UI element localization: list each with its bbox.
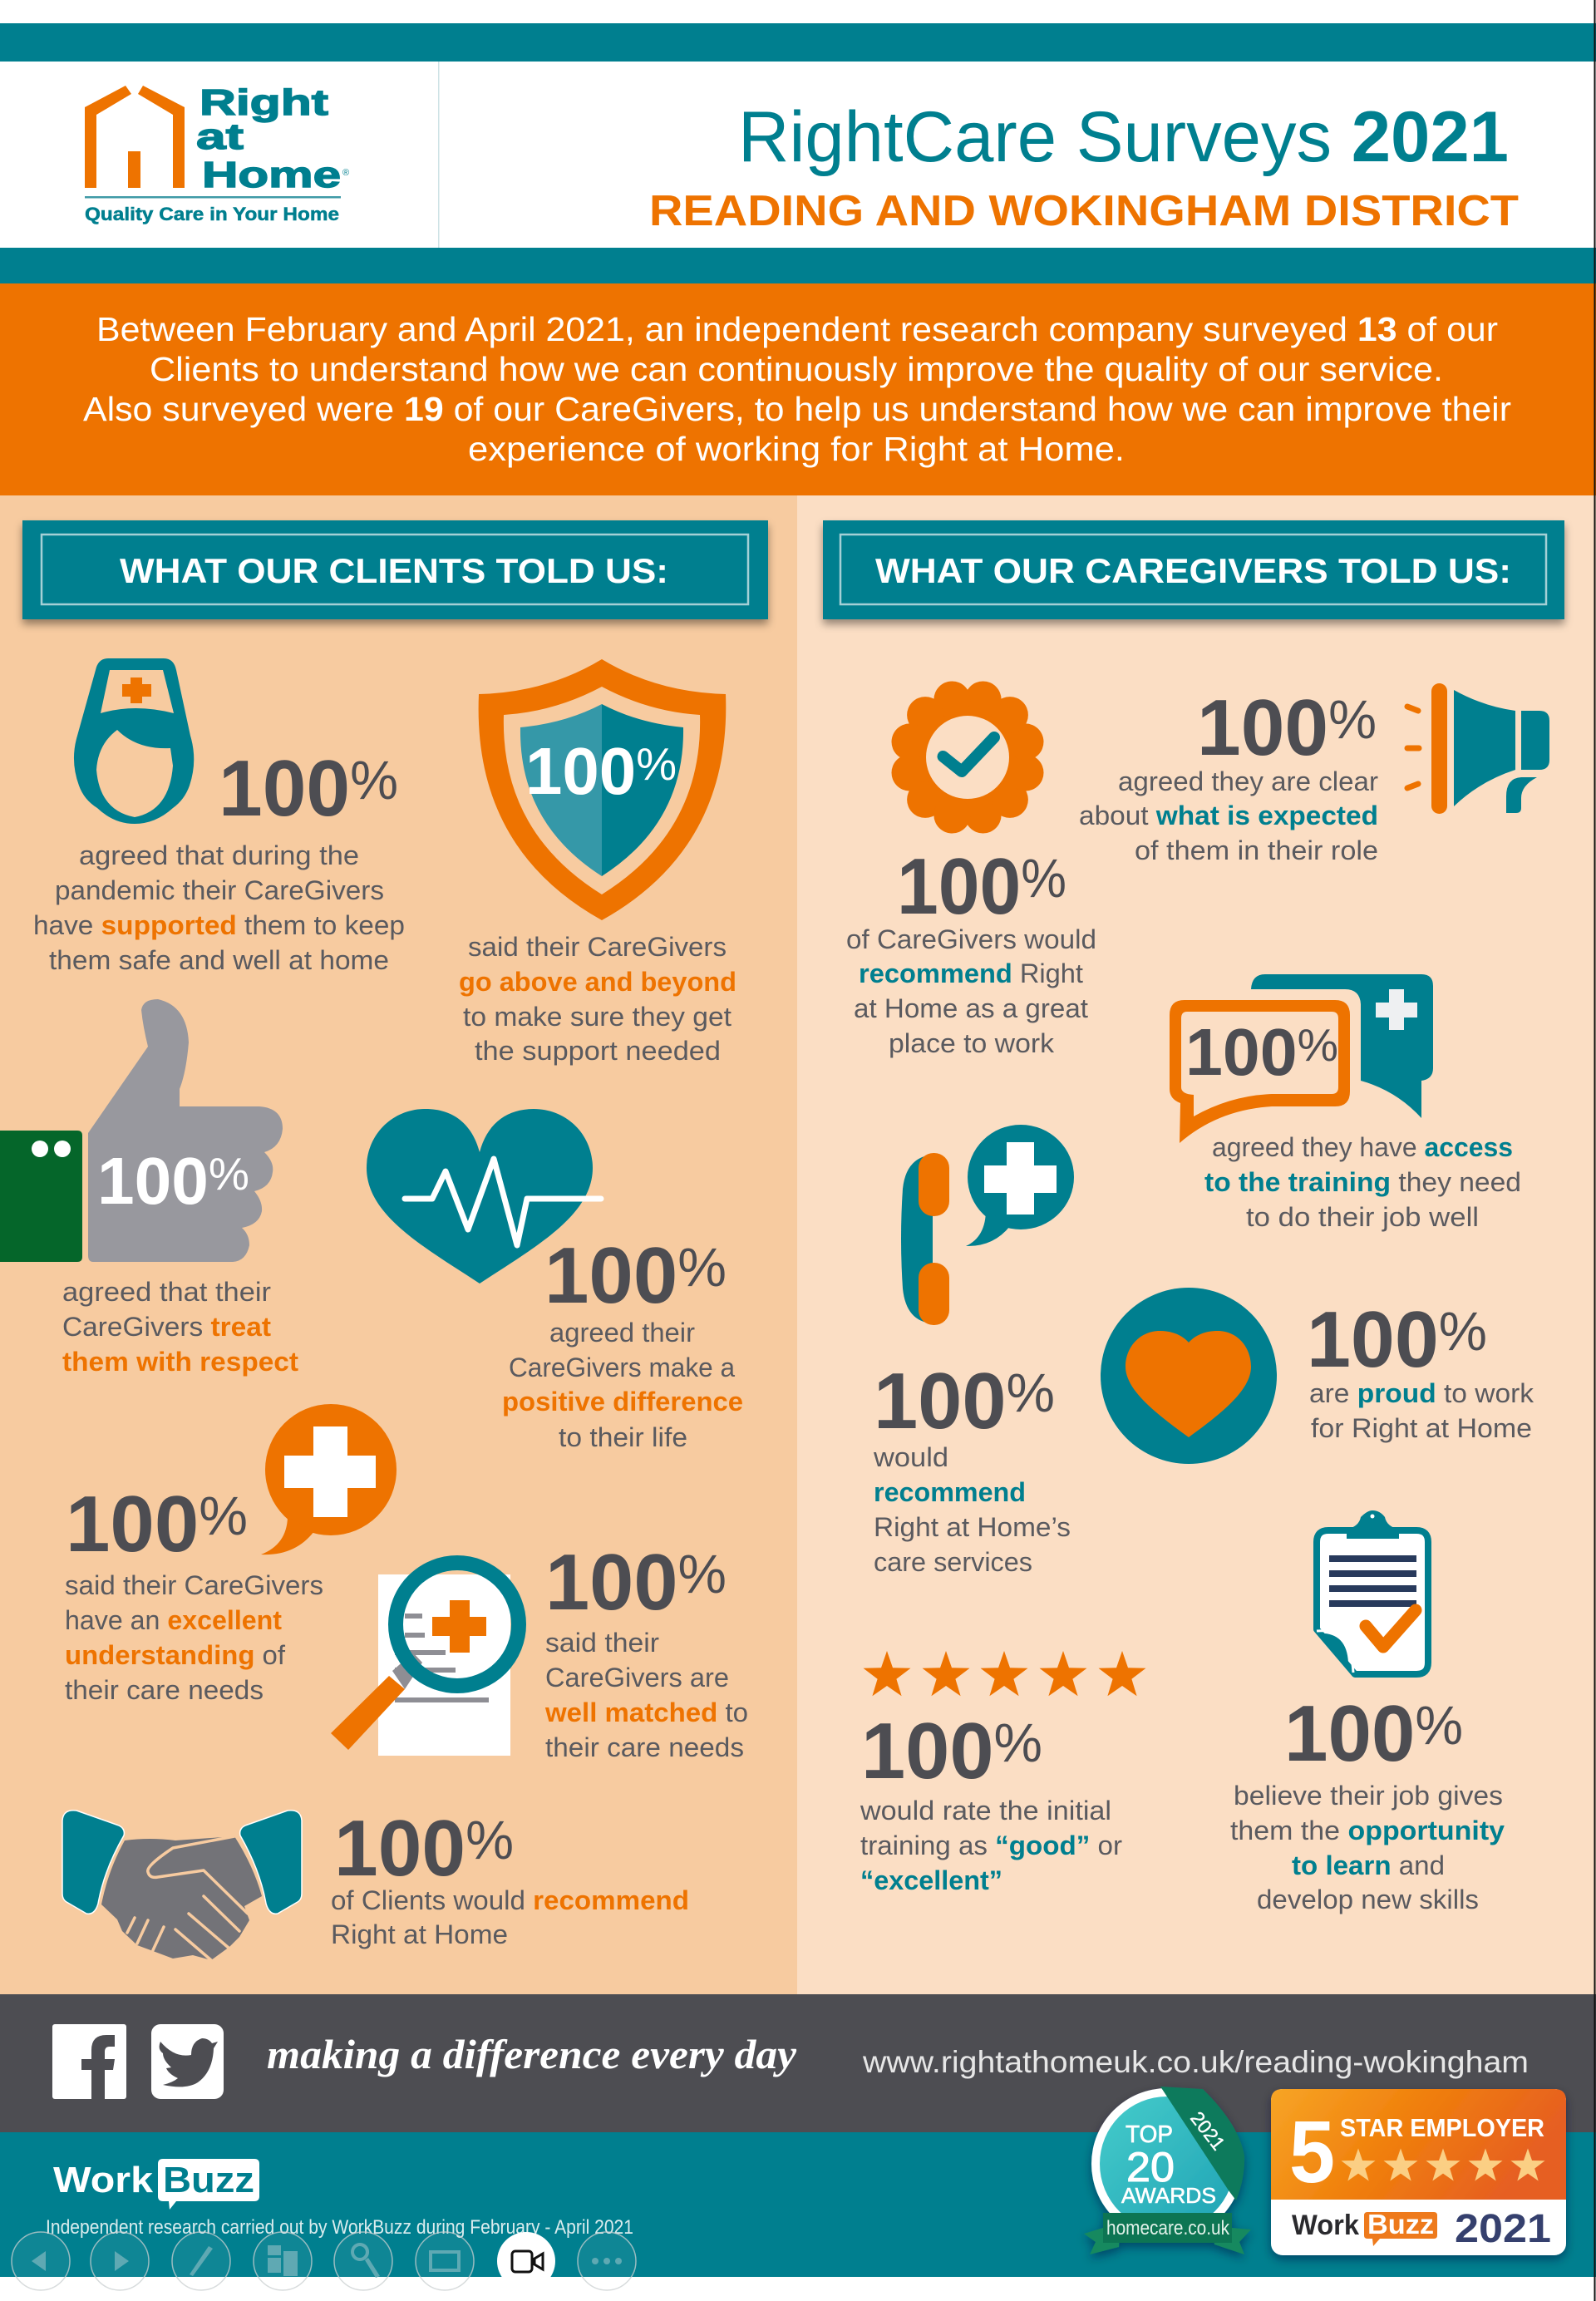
logo wordmark: at: [196, 116, 244, 157]
stat: recommend care services: [873, 1125, 1074, 1577]
panel: clients: [0, 495, 797, 1994]
description: said their CareGivers: [468, 932, 727, 962]
icon: megaphone: [1407, 683, 1549, 814]
icon: nurse: [74, 658, 194, 824]
description: them the opportunity: [1230, 1816, 1505, 1845]
percentage: 100: [544, 1231, 677, 1320]
stat: recommend: [62, 1804, 689, 1960]
description: of them in their role: [1135, 835, 1378, 865]
header band: [0, 23, 1596, 283]
description: [331, 1885, 689, 1949]
icon: speech bubbles: [1170, 974, 1433, 1143]
footer: social band: [0, 1994, 1596, 2132]
description: for Right at Home: [1311, 1413, 1532, 1443]
percentage: 100: [1197, 683, 1330, 772]
percentage: %: [466, 1809, 514, 1870]
icon: facebook: [52, 2024, 126, 2099]
percentage: %: [1021, 847, 1066, 909]
description: [1204, 1132, 1521, 1232]
title: RightCare Surveys 2021: [738, 97, 1509, 177]
description: Right at Home’s: [874, 1512, 1071, 1542]
description: [544, 1628, 748, 1762]
description: said their: [545, 1628, 659, 1658]
award: 5 star employer: Work: [1292, 2210, 1359, 2241]
percentage: 100: [874, 1357, 1007, 1446]
description: believe their job gives: [1234, 1781, 1503, 1811]
description: to learn and: [1292, 1850, 1445, 1880]
description: said their CareGivers: [65, 1570, 323, 1600]
icon: twitter: [151, 2024, 224, 2099]
percentage: %: [994, 1712, 1042, 1773]
award: Top 20: [1084, 2087, 1251, 2254]
description: their care needs: [545, 1732, 744, 1762]
description: [1309, 1378, 1534, 1443]
description: recommend: [874, 1477, 1026, 1507]
logo: WorkBuzz: [53, 2159, 259, 2210]
percentage: 100: [219, 744, 352, 833]
icon: magnifier over document: [331, 1563, 519, 1756]
description: care services: [874, 1547, 1032, 1577]
description: [502, 1318, 743, 1452]
logo: WorkBuzz: Work: [53, 2160, 154, 2200]
presentation controls: [12, 2232, 636, 2290]
panel: caregivers: [797, 495, 1596, 1994]
stat: access to the training: [1170, 974, 1521, 1232]
icon: five stars: [863, 1651, 1145, 1696]
description: [459, 932, 736, 1066]
icon: telephone with medical bubble: [901, 1125, 1074, 1325]
research note: Independent research carried out by WorkBuzz during February - April 2021: [46, 2216, 633, 2239]
percentage: %: [1298, 1019, 1338, 1071]
stat: supported: [33, 658, 405, 975]
description: would rate the initial: [860, 1796, 1111, 1826]
description: [846, 924, 1096, 1058]
description: [33, 840, 405, 975]
description: them with respect: [62, 1347, 298, 1377]
description: understanding of: [65, 1640, 285, 1670]
description: the support needed: [475, 1036, 721, 1066]
percentage: %: [1439, 1300, 1487, 1362]
award: 5 star employer: 2021: [1455, 2207, 1551, 2251]
description: develop new skills: [1257, 1885, 1479, 1914]
description: pandemic their CareGivers: [55, 875, 384, 905]
stat: initial training rating: [860, 1651, 1145, 1895]
description: agreed that their: [62, 1277, 271, 1307]
intro panel: Clients to understand how we can continuously improve the quality of our service.: [150, 350, 1443, 388]
footer: teal band: [0, 2132, 1596, 2277]
description: [65, 1570, 323, 1705]
description: agreed their: [549, 1318, 695, 1348]
stat: excellent understanding: [65, 1404, 397, 1705]
stat: opportunity to learn: [1230, 1510, 1505, 1914]
award: Top 20: 2021: [1186, 2107, 1229, 2154]
logo wordmark: ®: [342, 168, 349, 178]
percentage: %: [350, 749, 398, 811]
description: CareGivers treat: [62, 1312, 271, 1342]
stat: respect: [0, 999, 298, 1377]
percentage: 100: [1185, 1015, 1296, 1089]
heading: what our clients told us: [22, 520, 768, 619]
description: agreed they have access: [1212, 1132, 1513, 1162]
description: at Home as a great: [854, 993, 1088, 1023]
description: are proud to work: [1309, 1378, 1534, 1408]
description: have supported them to keep: [33, 910, 405, 940]
description: go above and beyond: [459, 967, 736, 997]
description: agreed that during the: [79, 840, 359, 870]
icon: thumbs up: %: [209, 1148, 249, 1200]
description: [1230, 1781, 1505, 1914]
icon: shield: [479, 659, 726, 920]
logo wordmark: Home: [202, 155, 341, 195]
active video control: [497, 2232, 555, 2290]
description: [1079, 766, 1378, 865]
description: CareGivers make a: [509, 1353, 735, 1382]
heading: what our caregivers told us: [823, 520, 1564, 619]
award: 5 star employer: [1271, 2089, 1566, 2255]
tagline: making a difference every day: [267, 2031, 797, 2077]
percentage: 100: [545, 1538, 678, 1627]
description: recommend Right: [859, 958, 1083, 988]
percentage: %: [1415, 1694, 1463, 1756]
intro panel: Between February and April 2021, an independent research company surveyed 13 of our: [96, 310, 1498, 348]
percentage: %: [677, 1236, 727, 1298]
description: would: [873, 1442, 948, 1472]
award: Top 20: 20: [1126, 2144, 1175, 2190]
intro panel: [0, 283, 1596, 495]
stat: what is expected: [1079, 683, 1549, 865]
website: www.rightathomeuk.co.uk/reading-wokingham: [862, 2045, 1529, 2079]
description: [62, 1277, 298, 1377]
description: to make sure they get: [463, 1002, 732, 1032]
description: [860, 1796, 1122, 1895]
logo: Right at Home: [85, 82, 349, 224]
icon: medical speech bubble: [261, 1404, 397, 1555]
award: Top 20: AWARDS: [1121, 2183, 1216, 2208]
percentage: 100: [1307, 1295, 1440, 1384]
percentage: 100: [897, 842, 1030, 931]
award: 5 star employer: Buzz: [1367, 2209, 1434, 2239]
award: 5 star employer: STAR EMPLOYER: [1340, 2113, 1544, 2142]
percentage: 100: [861, 1707, 994, 1796]
icon: clipboard with tick: [1317, 1510, 1428, 1674]
logo: WorkBuzz: Buzz: [163, 2160, 254, 2200]
percentage: %: [1328, 688, 1377, 750]
description: “excellent”: [860, 1865, 1002, 1895]
description: Right at Home: [331, 1919, 508, 1949]
award: Top 20: TOP: [1126, 2121, 1173, 2148]
description: have an excellent: [65, 1605, 282, 1635]
description: to the training they need: [1204, 1167, 1521, 1197]
description: positive difference: [502, 1387, 743, 1417]
description: of Clients would recommend: [331, 1885, 689, 1915]
description: about what is expected: [1079, 801, 1378, 830]
description: place to work: [889, 1028, 1055, 1058]
icon: house: [85, 86, 185, 188]
award: 5 star employer: 5: [1289, 2103, 1335, 2201]
percentage: %: [199, 1485, 248, 1546]
icon: shield: 100: [525, 734, 636, 808]
description: of CareGivers would: [846, 924, 1096, 954]
stat: proud: [1101, 1288, 1534, 1464]
icon: heart with pulse: [367, 1109, 601, 1284]
stat: positive difference: [367, 1109, 743, 1452]
description: their care needs: [65, 1675, 264, 1705]
description: them safe and well at home: [49, 945, 389, 975]
icon: thumbs up: 100: [97, 1144, 208, 1218]
stat: above and beyond: [459, 659, 736, 1066]
stat: well matched: [331, 1538, 748, 1762]
logo wordmark: Right: [200, 82, 328, 123]
description: well matched to: [544, 1697, 748, 1727]
logo wordmark: [85, 82, 349, 224]
window edge line: [1594, 0, 1596, 2301]
icon: rosette check badge: [891, 682, 1044, 833]
percentage: %: [1007, 1362, 1055, 1423]
stat: recommend as a place to work: [846, 682, 1096, 1058]
award: Top 20: homecare.co.uk: [1106, 2217, 1230, 2239]
icon: shield: %: [636, 738, 677, 790]
heading: what our clients told us: WHAT OUR CLIENTS TOLD US:: [120, 551, 668, 590]
description: to do their job well: [1246, 1202, 1479, 1232]
description: CareGivers are: [545, 1663, 729, 1692]
percentage: 100: [66, 1480, 199, 1569]
description: to their life: [559, 1422, 687, 1452]
logo wordmark: Quality Care in Your Home: [85, 204, 339, 224]
description: agreed they are clear: [1118, 766, 1378, 796]
percentage: %: [678, 1543, 727, 1604]
icon: thumbs up: [0, 999, 283, 1262]
intro panel: experience of working for Right at Home.: [468, 430, 1125, 468]
description: training as “good” or: [860, 1830, 1122, 1860]
percentage: 100: [334, 1804, 467, 1893]
icon: handshake: [62, 1811, 302, 1960]
icon: heart in circle: [1101, 1288, 1277, 1464]
heading: what our caregivers told us: WHAT OUR CAREGIVERS TOLD US:: [875, 551, 1511, 590]
intro panel: Also surveyed were 19 of our CareGivers, to help us understand how we can improve their: [83, 390, 1511, 428]
subtitle: READING AND WOKINGHAM DISTRICT: [649, 187, 1519, 235]
description: [873, 1442, 1071, 1577]
percentage: 100: [1284, 1689, 1417, 1778]
